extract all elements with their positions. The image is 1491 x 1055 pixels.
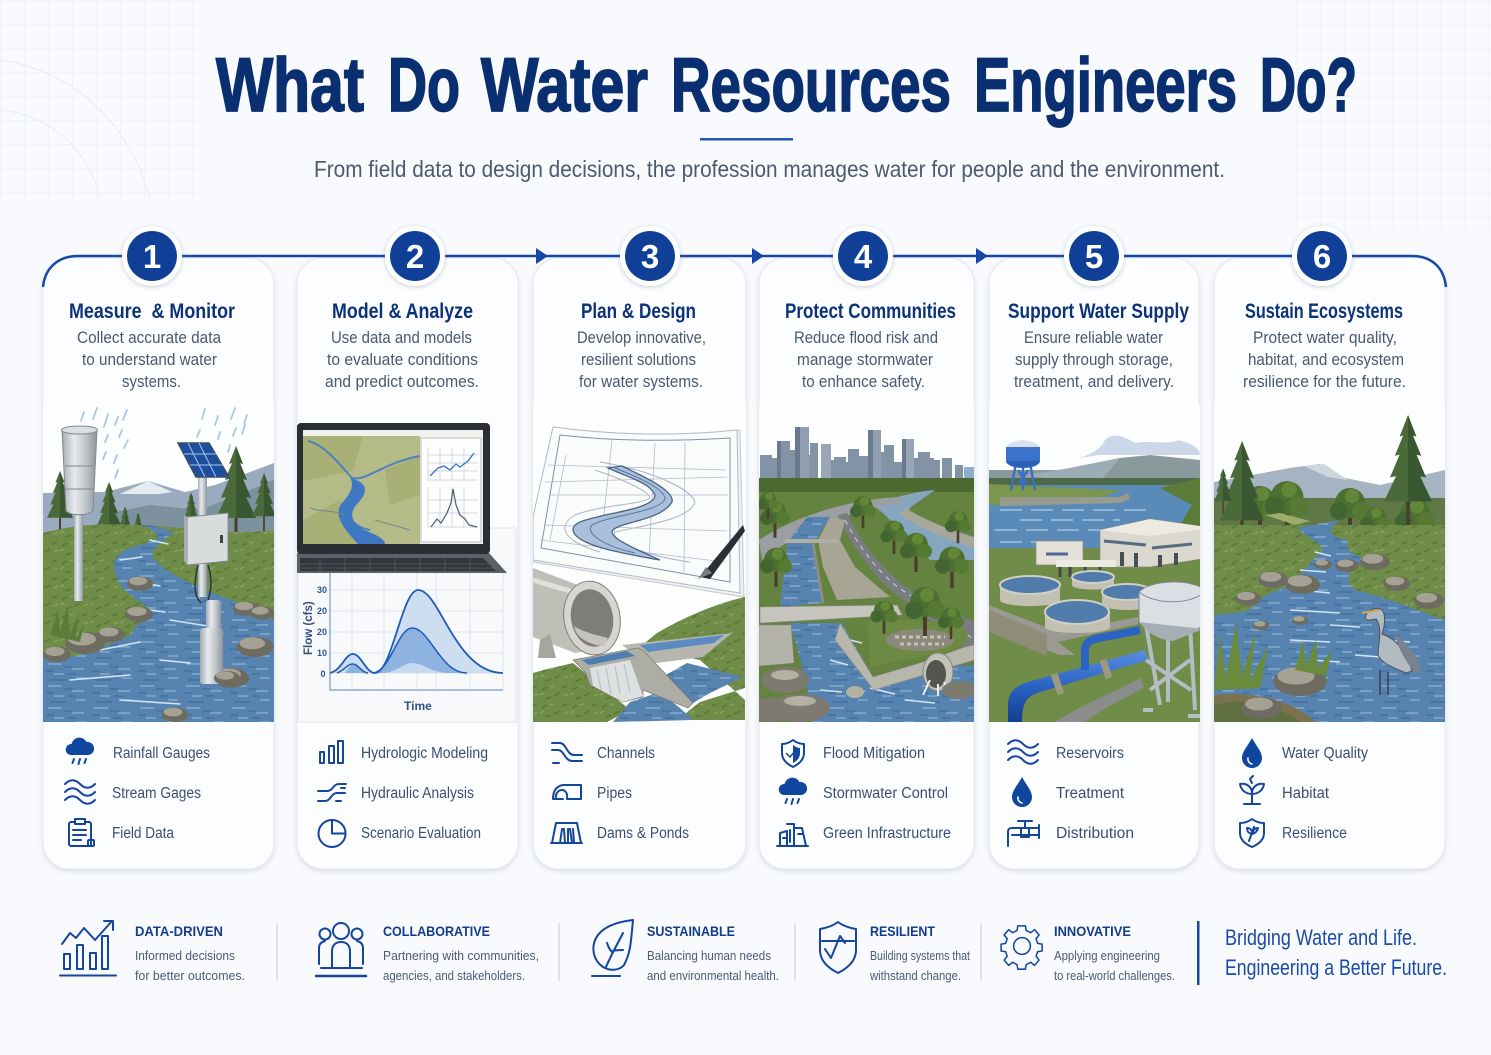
card 5 panel bbox=[989, 258, 1199, 869]
illustration 1: rain gauge and stream monitoring station bbox=[43, 405, 276, 722]
icon: dam bbox=[551, 823, 582, 843]
value: resilient: Building systems that bbox=[870, 949, 970, 963]
step badge 1: 1 bbox=[143, 238, 161, 275]
card 6 panel bbox=[1214, 258, 1445, 869]
card 6 heading and description: resilience for the future. bbox=[1243, 373, 1406, 391]
tagline divider bbox=[1197, 921, 1200, 985]
icon: gear bbox=[1001, 926, 1042, 969]
step badge 5: 5 bbox=[1085, 238, 1103, 275]
illustration 2: laptop with watershed model and hydrograph bbox=[297, 423, 516, 722]
card 2 heading and description: Model & Analyze bbox=[332, 300, 473, 323]
card 6 heading and description: habitat, and ecosystem bbox=[1248, 351, 1404, 369]
icon: buildings bbox=[777, 824, 808, 846]
tagline bbox=[1225, 925, 1447, 980]
icon: water quality drop bbox=[1242, 738, 1262, 768]
card 2 heading and description: to evaluate conditions bbox=[327, 351, 478, 369]
icon: growth chart bbox=[60, 921, 116, 976]
step badge 3: 3 bbox=[641, 238, 659, 275]
chart axis labels: 30 bbox=[317, 585, 327, 595]
illustration 4: urban flood channels and stormwater outfall bbox=[750, 405, 978, 722]
icon: shield bbox=[782, 740, 804, 767]
icon: rainfall bbox=[66, 738, 94, 764]
icon: storm cloud bbox=[779, 778, 807, 804]
title divider bbox=[700, 138, 793, 140]
icon: clipboard bbox=[69, 819, 94, 846]
card 4 heading and description: manage stormwater bbox=[797, 351, 933, 369]
value: sustainable: SUSTAINABLE bbox=[647, 923, 735, 939]
icon: bars bbox=[320, 741, 343, 763]
card 6 feature list bbox=[1240, 738, 1368, 847]
icon: treatment drop bbox=[1012, 777, 1032, 807]
chart axis labels: 0 bbox=[320, 669, 326, 679]
card 6 heading and description: Sustain Ecosystems bbox=[1245, 300, 1403, 323]
card 3 feature list: Channels bbox=[597, 745, 655, 762]
value: resilient: withstand change. bbox=[869, 969, 961, 983]
value: sustainable: Balancing human needs bbox=[647, 949, 771, 963]
card 4 heading and description: Protect Communities bbox=[785, 300, 956, 323]
card 2 feature list: Scenario Evaluation bbox=[361, 825, 481, 842]
icon: hydraulic profile bbox=[318, 784, 346, 801]
step badge 4: 4 bbox=[854, 238, 873, 275]
illustration 5: water treatment plant and reservoir bbox=[989, 405, 1213, 722]
illustration 3: channel design plan, pipe and dam bbox=[533, 405, 746, 722]
card 1 feature list: Field Data bbox=[112, 825, 174, 842]
background grid: top left bbox=[0, 0, 200, 200]
card 4 feature list: Stormwater Control bbox=[823, 785, 948, 802]
separator 4 bbox=[980, 923, 982, 981]
tagline: Bridging Water and Life. bbox=[1225, 925, 1417, 950]
card 4 panel bbox=[759, 258, 974, 869]
card 4 heading and description: to enhance safety. bbox=[802, 373, 925, 391]
value: collaborative: agencies, and stakeholders. bbox=[383, 969, 525, 983]
card 2 feature list: Hydrologic Modeling bbox=[361, 745, 488, 762]
card 3 feature list: Dams & Ponds bbox=[597, 825, 689, 842]
title: Resources bbox=[671, 43, 951, 128]
icon: distribution valve bbox=[1008, 821, 1039, 846]
card 4 heading and description bbox=[785, 300, 956, 391]
title: Do bbox=[388, 43, 460, 128]
laptop bbox=[297, 423, 507, 573]
icon: pipe bbox=[553, 785, 581, 799]
step badge 3 bbox=[620, 226, 680, 286]
card 1 heading and description: Measure & Monitor bbox=[69, 300, 235, 323]
card 6 heading and description bbox=[1243, 300, 1406, 391]
card 2 feature list: Hydraulic Analysis bbox=[361, 785, 474, 802]
card 1 feature list: Rainfall Gauges bbox=[113, 745, 210, 762]
hydrograph chart bbox=[298, 528, 516, 722]
card 6 feature list: Water Quality bbox=[1282, 745, 1368, 762]
title: What bbox=[216, 43, 364, 128]
chart axis title: flow: Flow (cfs) bbox=[303, 601, 315, 655]
icon: people bbox=[316, 923, 366, 976]
icon: leaf bbox=[592, 920, 633, 976]
card 5 heading and description: Ensure reliable water bbox=[1024, 329, 1163, 347]
chart axis labels: 20 bbox=[317, 606, 327, 616]
card 1 panel bbox=[43, 258, 274, 869]
card 5 feature list: Distribution bbox=[1056, 825, 1134, 842]
card 4 feature list: Green Infrastructure bbox=[823, 825, 951, 842]
value: collaborative bbox=[316, 923, 539, 983]
card 4 feature list: Flood Mitigation bbox=[823, 745, 925, 762]
value: innovative bbox=[1001, 923, 1175, 983]
chart axis labels bbox=[317, 585, 327, 679]
separator 2 bbox=[558, 923, 560, 981]
card 5 feature list: Reservoirs bbox=[1056, 745, 1124, 762]
card 1 heading and description bbox=[69, 300, 235, 391]
card 3 panel bbox=[533, 258, 746, 869]
card 5 heading and description: Support Water Supply bbox=[1008, 300, 1189, 323]
separator 1 bbox=[276, 923, 278, 981]
value: data-driven: DATA-DRIVEN bbox=[135, 923, 223, 939]
card 1 heading and description: to understand water bbox=[82, 351, 217, 369]
icon: reservoir waves bbox=[1008, 740, 1038, 764]
card 2 heading and description: Use data and models bbox=[331, 329, 472, 347]
illustration 6: restored stream habitat with heron bbox=[1214, 405, 1445, 722]
value: innovative: Applying engineering bbox=[1054, 949, 1160, 963]
step badge 1 bbox=[122, 226, 182, 286]
card 2 heading and description bbox=[325, 300, 479, 391]
card 2 heading and description: and predict outcomes. bbox=[325, 373, 479, 391]
step badge 6 bbox=[1292, 226, 1352, 286]
title: Water bbox=[481, 43, 648, 128]
subtitle: From field data to design decisions, the profession manages water for people and the environment. bbox=[314, 156, 1225, 182]
timeline arrow 3 bbox=[976, 248, 988, 264]
chart axis title: time: Time bbox=[404, 699, 432, 713]
step badge 2: 2 bbox=[406, 238, 424, 275]
step badge 4 bbox=[833, 226, 893, 286]
icon: habitat sprout bbox=[1240, 776, 1264, 804]
card 5 heading and description: supply through storage, bbox=[1015, 351, 1173, 369]
timeline arrow 2 bbox=[752, 248, 764, 264]
card 3 heading and description: Develop innovative, bbox=[577, 329, 706, 347]
card 3 feature list bbox=[551, 743, 689, 843]
card 5 heading and description bbox=[1008, 300, 1189, 391]
card 1 heading and description: systems. bbox=[122, 373, 181, 391]
card 3 heading and description: Plan & Design bbox=[581, 300, 696, 323]
value: resilient: RESILIENT bbox=[870, 923, 935, 939]
card 3 feature list: Pipes bbox=[597, 785, 632, 802]
title: Engineers bbox=[974, 43, 1237, 128]
card 1 feature list bbox=[65, 738, 210, 846]
timeline arrow 1 bbox=[536, 248, 548, 264]
card 4 feature list bbox=[777, 740, 951, 846]
background grid: top right bbox=[1290, 0, 1491, 230]
value: resilient bbox=[820, 922, 970, 983]
chart axis labels: 10 bbox=[317, 648, 327, 658]
card 4 heading and description: Reduce flood risk and bbox=[794, 329, 938, 347]
card 1 heading and description: Collect accurate data bbox=[77, 329, 222, 347]
step badge 6: 6 bbox=[1313, 238, 1331, 275]
value: data-driven bbox=[60, 921, 245, 983]
value: innovative: INNOVATIVE bbox=[1054, 923, 1131, 939]
card 5 heading and description: treatment, and delivery. bbox=[1014, 373, 1174, 391]
card 3 heading and description bbox=[577, 300, 706, 391]
separator 3 bbox=[794, 923, 796, 981]
timeline connector bbox=[43, 256, 1446, 287]
card 6 feature list: Resilience bbox=[1282, 825, 1347, 842]
card 3 heading and description: for water systems. bbox=[579, 373, 703, 391]
card 2 panel bbox=[297, 258, 518, 869]
icon: stream waves bbox=[65, 780, 95, 804]
card 6 feature list: Habitat bbox=[1282, 785, 1330, 802]
icon: pie chart bbox=[318, 820, 346, 847]
value: data-driven: for better outcomes. bbox=[135, 969, 245, 983]
value: data-driven: Informed decisions bbox=[135, 949, 235, 963]
icon: resilience shield bbox=[1240, 819, 1264, 847]
icon: channel bbox=[552, 743, 582, 763]
value: sustainable bbox=[592, 920, 779, 983]
card 1 feature list: Stream Gages bbox=[112, 785, 201, 802]
value: sustainable: and environmental health. bbox=[647, 969, 779, 983]
card 6 heading and description: Protect water quality, bbox=[1253, 329, 1397, 347]
value: innovative: to real-world challenges. bbox=[1054, 969, 1175, 983]
title: Do? bbox=[1260, 43, 1357, 128]
card 5 feature list bbox=[1008, 740, 1134, 846]
card 3 heading and description: resilient solutions bbox=[581, 351, 696, 369]
card 5 feature list: Treatment bbox=[1056, 785, 1125, 802]
step badge 2 bbox=[385, 226, 445, 286]
value: collaborative: Partnering with communities, bbox=[383, 949, 539, 963]
value: collaborative: COLLABORATIVE bbox=[383, 923, 490, 939]
chart axis labels: 20 bbox=[317, 627, 327, 637]
step badge 5 bbox=[1064, 226, 1124, 286]
icon: resilient shield bbox=[820, 922, 856, 973]
card 2 feature list bbox=[318, 741, 488, 847]
